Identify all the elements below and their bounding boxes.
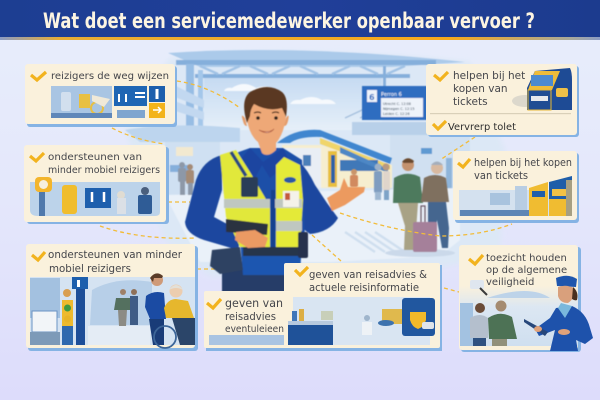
hi-vis vest [220,150,303,248]
right arm [298,160,338,234]
check icon [207,299,221,308]
radio [298,232,308,258]
body camera [241,177,258,197]
text: helpen bij het [453,70,525,82]
icon: ticket machine [512,68,572,110]
check icon small [295,267,308,275]
central figure: service worker [185,87,365,300]
dashed connectors [100,81,512,292]
thumbnail: station scene [460,280,578,346]
text: op de algemene [486,265,567,276]
station roof [168,50,465,142]
departure board: Leiden C. 12:26 [383,112,410,116]
thumbnail: service desk [209,297,435,345]
check icon [31,72,46,80]
thumbnail [30,277,195,345]
thumbnail: direction sign [114,86,147,118]
background people [178,162,194,195]
departure board: Utrecht C. 12:08 [383,102,411,106]
panel: ondersteunen small [24,145,169,224]
id badge [283,191,299,207]
panel: tickets lower [453,151,579,223]
shirt tail [240,240,302,275]
departure board: 6 [369,93,375,102]
text: geven van reisadvies & [309,269,427,281]
trousers [222,262,296,300]
thumbnail: luggage [51,86,112,118]
check icon [30,153,44,161]
attendant [524,276,593,351]
side text 3: eventuleieen [225,324,284,335]
hair, face [242,87,289,155]
check icon [469,255,483,264]
panel: ondersteunen large [26,244,198,351]
thumbnail [30,177,160,216]
pouch [210,247,243,274]
icon: arrow [149,103,165,118]
check icon [458,159,470,167]
text line 2: minder mobiel reizigers [48,165,160,176]
open hand [327,178,365,211]
helper and wheelchair [145,273,195,348]
station hall [165,142,220,197]
text: kopen van [453,83,508,95]
departure board [362,86,428,120]
header band [0,0,600,40]
panel: reisadvies [204,263,442,351]
side text: geven van [225,296,283,310]
check icon [32,252,45,260]
tablet [226,219,268,235]
belt [243,247,303,256]
text: Vervrerp tolet [448,122,516,133]
platform floor [165,188,460,262]
torso [222,148,305,240]
text: ondersteunen van minder [48,249,183,261]
illustration: station background [125,50,505,276]
icon: info [149,86,165,102]
departure board: Perron 6 [381,92,402,98]
panel: toezicht [459,245,593,352]
side text 2: reisadvies [225,311,276,323]
check icon [433,121,446,129]
text line 2: actuele reisinformatie [309,282,419,294]
text line 2: mobiel reizigers [49,263,131,275]
text: tickets [453,96,488,108]
left arm [185,155,242,250]
text: veiligheid [486,277,534,288]
departure board: Nijmegen C. 12:15 [383,107,415,111]
sky [204,78,382,130]
check icon [434,72,448,80]
text: ondersteunen van [48,152,142,163]
text line 2: van tickets [474,170,528,182]
upper level platforms [172,84,204,120]
collar [240,148,290,180]
people: couple with suitcase [350,158,455,257]
text: helpen bij het kopen [474,157,572,169]
text: reizigers de weg wijzen [51,71,169,82]
text: toezicht houden [486,253,567,264]
thumbnail: machines [459,176,572,216]
vest logo [284,177,296,183]
panel: tickets top [426,64,579,137]
panel: reizigers de weg wijzen [25,64,177,127]
train [277,130,392,188]
holding hand [235,230,268,248]
